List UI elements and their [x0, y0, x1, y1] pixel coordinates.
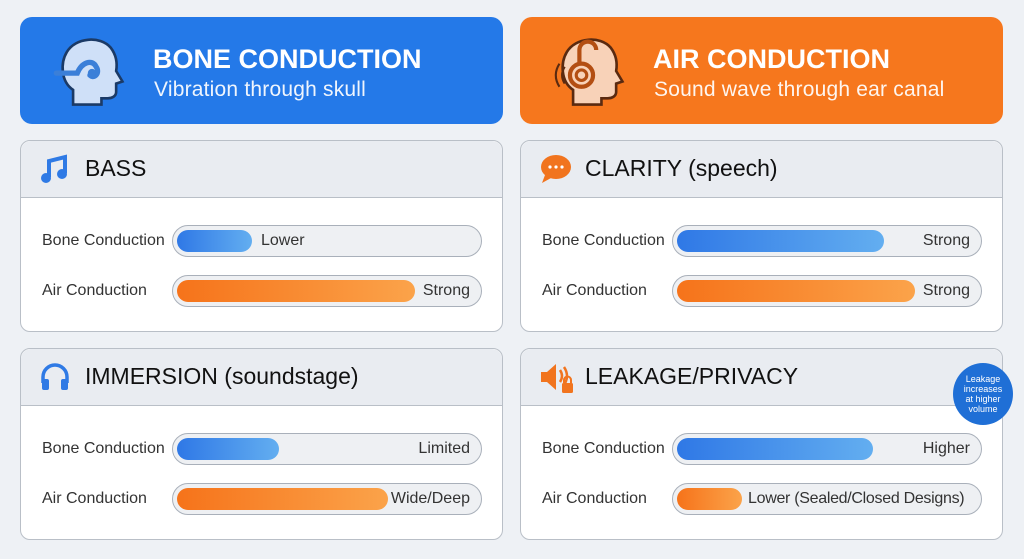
row: air immersion: Air Conduction — [42, 490, 147, 507]
icon: head with bone conduction headset — [54, 38, 124, 106]
row: bone clarity: Bone Conduction — [542, 232, 665, 249]
panel header: clarity: CLARITY (speech) — [585, 155, 778, 181]
icon: head with headphones — [554, 38, 624, 106]
header subtitle: Vibration through skull — [154, 78, 366, 101]
row: bone immersion: Bone Conduction — [42, 440, 165, 457]
panel: leakage — [520, 348, 1003, 540]
row: air bass — [42, 275, 482, 307]
row: air clarity: Strong — [923, 282, 970, 299]
row: air clarity — [542, 275, 982, 307]
panel: immersion — [20, 348, 503, 540]
panel header: leakage — [521, 349, 1002, 406]
panel header: clarity — [521, 141, 1002, 198]
row: air immersion: Wide/Deep — [391, 490, 470, 507]
panel: clarity — [520, 140, 1003, 332]
header: bone conduction — [20, 17, 503, 124]
row: air leakage — [542, 483, 982, 515]
callout: leakage note — [953, 363, 1013, 425]
row: bone clarity: Strong — [923, 232, 970, 249]
row: bone leakage: Bone Conduction — [542, 440, 665, 457]
header title: BONE CONDUCTION — [153, 44, 422, 74]
row: bone bass: Bone Conduction — [42, 232, 165, 249]
row: air clarity: Air Conduction — [542, 282, 647, 299]
header subtitle: Sound wave through ear canal — [654, 78, 944, 101]
panel header: bass — [21, 141, 502, 198]
row: air leakage: Air Conduction — [542, 490, 647, 507]
row: air leakage: Lower (Sealed/Closed Designs) — [748, 490, 964, 507]
row: bone leakage: Higher — [923, 440, 970, 457]
row: bone bass — [42, 225, 482, 257]
row: bone clarity — [542, 225, 982, 257]
panel: bass — [20, 140, 503, 332]
header: air conduction — [520, 17, 1003, 124]
header title: AIR CONDUCTION — [653, 44, 890, 74]
panel header: bass: BASS — [85, 155, 146, 181]
panel header: leakage: LEAKAGE/PRIVACY — [585, 363, 798, 389]
row: air bass: Air Conduction — [42, 282, 147, 299]
panel header: immersion: IMMERSION (soundstage) — [85, 363, 359, 389]
row: bone leakage — [542, 433, 982, 465]
panel header: immersion — [21, 349, 502, 406]
row: air bass: Strong — [423, 282, 470, 299]
row: air immersion — [42, 483, 482, 515]
row: bone immersion: Limited — [418, 440, 470, 457]
row: bone bass: Lower — [261, 232, 305, 249]
callout: leakage note: Leakage increases at higher volume — [964, 374, 1002, 414]
row: bone immersion — [42, 433, 482, 465]
